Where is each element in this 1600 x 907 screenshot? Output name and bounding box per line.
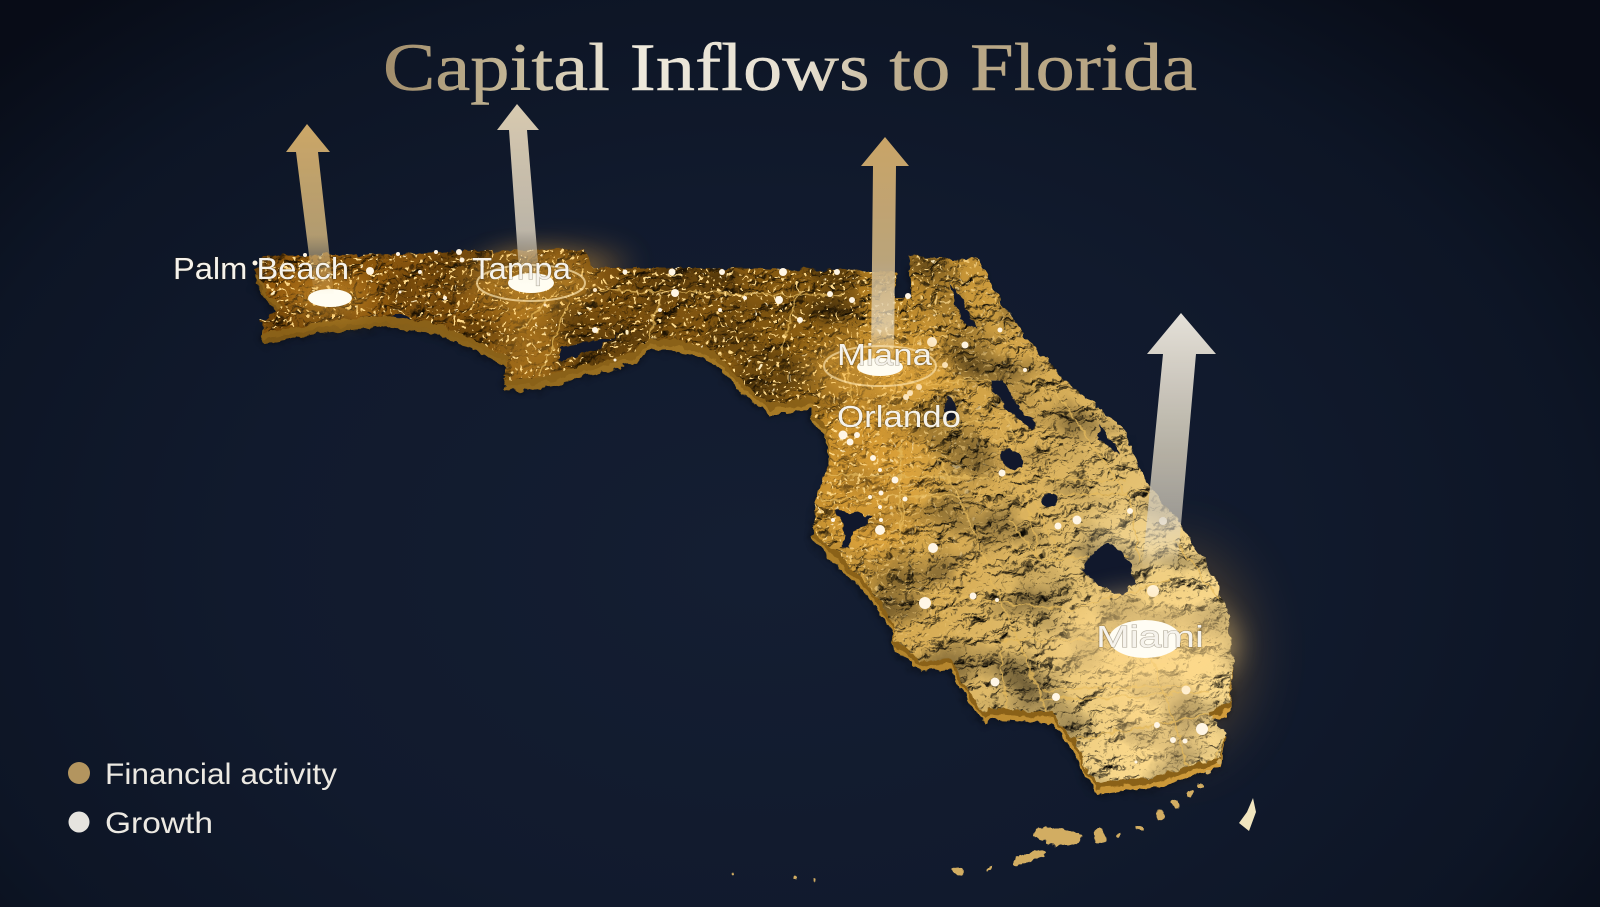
legend bbox=[68, 758, 337, 840]
city labels bbox=[173, 251, 1204, 654]
arrow: Tampa bbox=[497, 104, 540, 285]
map extrusion edge bbox=[254, 254, 1233, 794]
sparkle lights bbox=[258, 248, 1067, 656]
county lines bbox=[520, 290, 1250, 800]
island: Dry Tortugas style sliver bbox=[1239, 798, 1256, 831]
map gold surface bbox=[240, 235, 1250, 805]
city glow: Miami bbox=[1055, 595, 1235, 695]
label: Tampa: Tampa bbox=[472, 251, 572, 286]
city glow: Miana bbox=[805, 337, 955, 397]
label: Palm Beach: Palm Beach bbox=[173, 251, 349, 286]
map glow bbox=[490, 247, 1245, 750]
lakes bbox=[380, 285, 1134, 596]
map relief bbox=[240, 235, 1250, 882]
title: Capital Inflows to Florida bbox=[383, 29, 1197, 105]
growth dots bbox=[252, 249, 1208, 764]
label: Miami: Miami bbox=[1096, 619, 1204, 654]
arrow: Miana bbox=[861, 137, 909, 360]
city glow: Palm Beach bbox=[290, 282, 370, 314]
label: Miana: Miana bbox=[837, 337, 933, 372]
legend item: Growth bbox=[68, 807, 213, 840]
arrow: Palm Beach bbox=[286, 124, 334, 295]
city glow: Tampa bbox=[461, 256, 601, 308]
label: Orlando: Orlando bbox=[837, 399, 961, 434]
legend item: Growth: Growth bbox=[105, 807, 213, 840]
warm light pools bbox=[500, 290, 1210, 770]
keys and islands bbox=[732, 759, 1221, 882]
arrow: Miami bbox=[1142, 313, 1216, 570]
map of Florida bbox=[240, 235, 1256, 882]
legend item: Financial activity: Financial activity bbox=[105, 758, 337, 791]
